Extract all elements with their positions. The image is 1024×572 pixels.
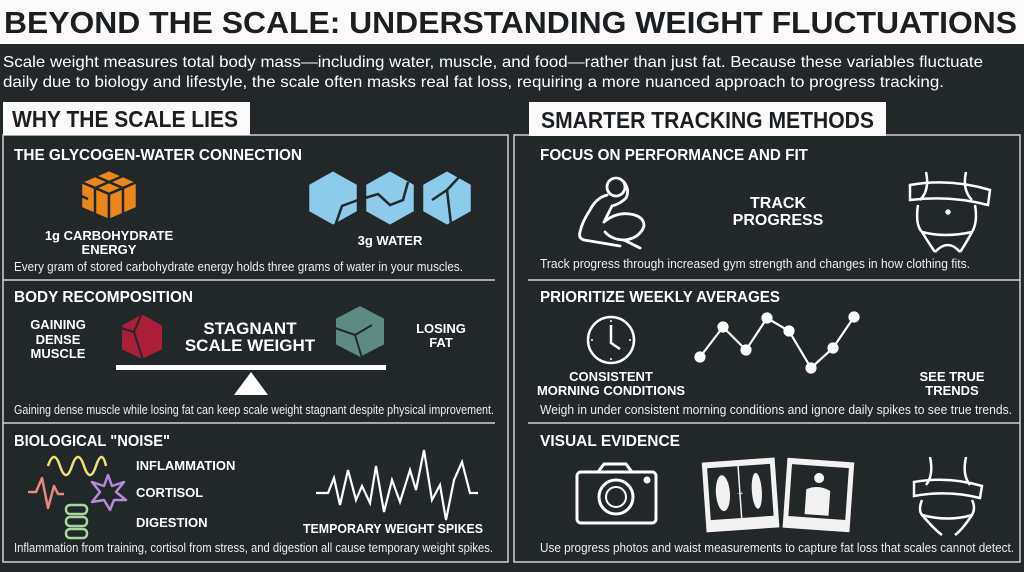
- subheading: weekly averages: PRIORITIZE WEEKLY AVERAGES: [540, 289, 780, 306]
- icon: camera: [577, 464, 656, 523]
- icon: orange carbohydrate cube: [81, 170, 137, 220]
- subheading: glycogen: THE GLYCOGEN-WATER CONNECTION: [14, 147, 302, 164]
- subheading: visual evidence: VISUAL EVIDENCE: [540, 433, 680, 450]
- labels: noise: INFLAMMATION: [136, 458, 235, 473]
- subtitle: daily due to biology and lifestyle, the scale often masks real fat loss, requiring a more nuanced approach to progress tracking.: [3, 74, 944, 91]
- caption: glycogen: Every gram of stored carbohydrate energy holds three grams of water in your muscles.: [14, 259, 463, 274]
- label: water: 3g WATER: [358, 233, 423, 248]
- label: track progress: [733, 195, 824, 229]
- icon: balance: [116, 365, 386, 395]
- label: carbohydrate: [45, 228, 173, 257]
- subtitle: [3, 54, 983, 91]
- label: see true trends: SEE TRUE: [919, 369, 985, 384]
- icon: flexed arm: [580, 178, 644, 248]
- label: spikes: TEMPORARY WEIGHT SPIKES: [303, 521, 483, 536]
- label: carbohydrate: ENERGY: [82, 242, 137, 257]
- label: see true trends: [919, 369, 985, 398]
- title: BEYOND THE SCALE: UNDERSTANDING WEIGHT FLUCTUATIONS: [4, 5, 1017, 40]
- icon: fat hex: [335, 305, 385, 358]
- chart: weekly line: [696, 312, 858, 372]
- label: losing fat: [416, 321, 466, 350]
- label: gaining muscle: GAINING: [30, 317, 86, 332]
- icon: clock: [588, 317, 634, 363]
- heading: why the scale lies: WHY THE SCALE LIES: [12, 106, 238, 132]
- subtitle: Scale weight measures total body mass—including water, muscle, and food—rather than just fat. Because these variables fluctuate: [3, 54, 983, 71]
- labels: noise: [136, 458, 235, 530]
- label: stagnant: [185, 319, 316, 355]
- icon: progress photos: [702, 458, 854, 532]
- label: consistent mornings: CONSISTENT: [569, 369, 653, 384]
- panel: why the scale lies: [3, 102, 508, 562]
- label: consistent mornings: [537, 369, 685, 398]
- label: losing fat: LOSING: [416, 321, 466, 336]
- icon: noise symbols: [28, 457, 126, 538]
- label: consistent mornings: MORNING CONDITIONS: [537, 383, 685, 398]
- icon: progress photos: →: [735, 487, 745, 497]
- caption: noise: Inflammation from training, cortisol from stress, and digestion all cause temporary weight spikes.: [14, 540, 493, 555]
- subheading: noise: BIOLOGICAL "NOISE": [14, 433, 170, 450]
- label: track progress: TRACK: [750, 195, 806, 212]
- icon: waist measurement: [914, 457, 982, 535]
- caption: recomposition: Gaining dense muscle while losing fat can keep scale weight stagnant despite physical improvement.: [14, 402, 494, 417]
- label: gaining muscle: MUSCLE: [31, 346, 86, 361]
- label: gaining muscle: [30, 317, 86, 361]
- caption: performance: Track progress through increased gym strength and changes in how clothing fits.: [540, 256, 970, 271]
- icon: waist tape: [910, 172, 990, 252]
- chart: weight spikes: [316, 450, 478, 520]
- label: carbohydrate: 1g CARBOHYDRATE: [45, 228, 173, 243]
- subheading: performance: FOCUS ON PERFORMANCE AND FIT: [540, 147, 808, 164]
- label: stagnant: STAGNANT: [203, 319, 297, 338]
- icon: water hexagons: [308, 170, 472, 226]
- icon: muscle hex: [121, 313, 163, 360]
- label: see true trends: TRENDS: [925, 383, 979, 398]
- labels: noise: DIGESTION: [136, 515, 208, 530]
- label: losing fat: FAT: [429, 335, 453, 350]
- panel: smarter tracking methods: [514, 102, 1020, 562]
- labels: noise: CORTISOL: [136, 485, 203, 500]
- label: gaining muscle: DENSE: [36, 332, 81, 347]
- label: track progress: PROGRESS: [733, 212, 824, 229]
- heading: smarter tracking: SMARTER TRACKING METHODS: [541, 107, 874, 133]
- label: stagnant: SCALE WEIGHT: [185, 336, 316, 355]
- subheading: body recomposition: BODY RECOMPOSITION: [14, 289, 193, 306]
